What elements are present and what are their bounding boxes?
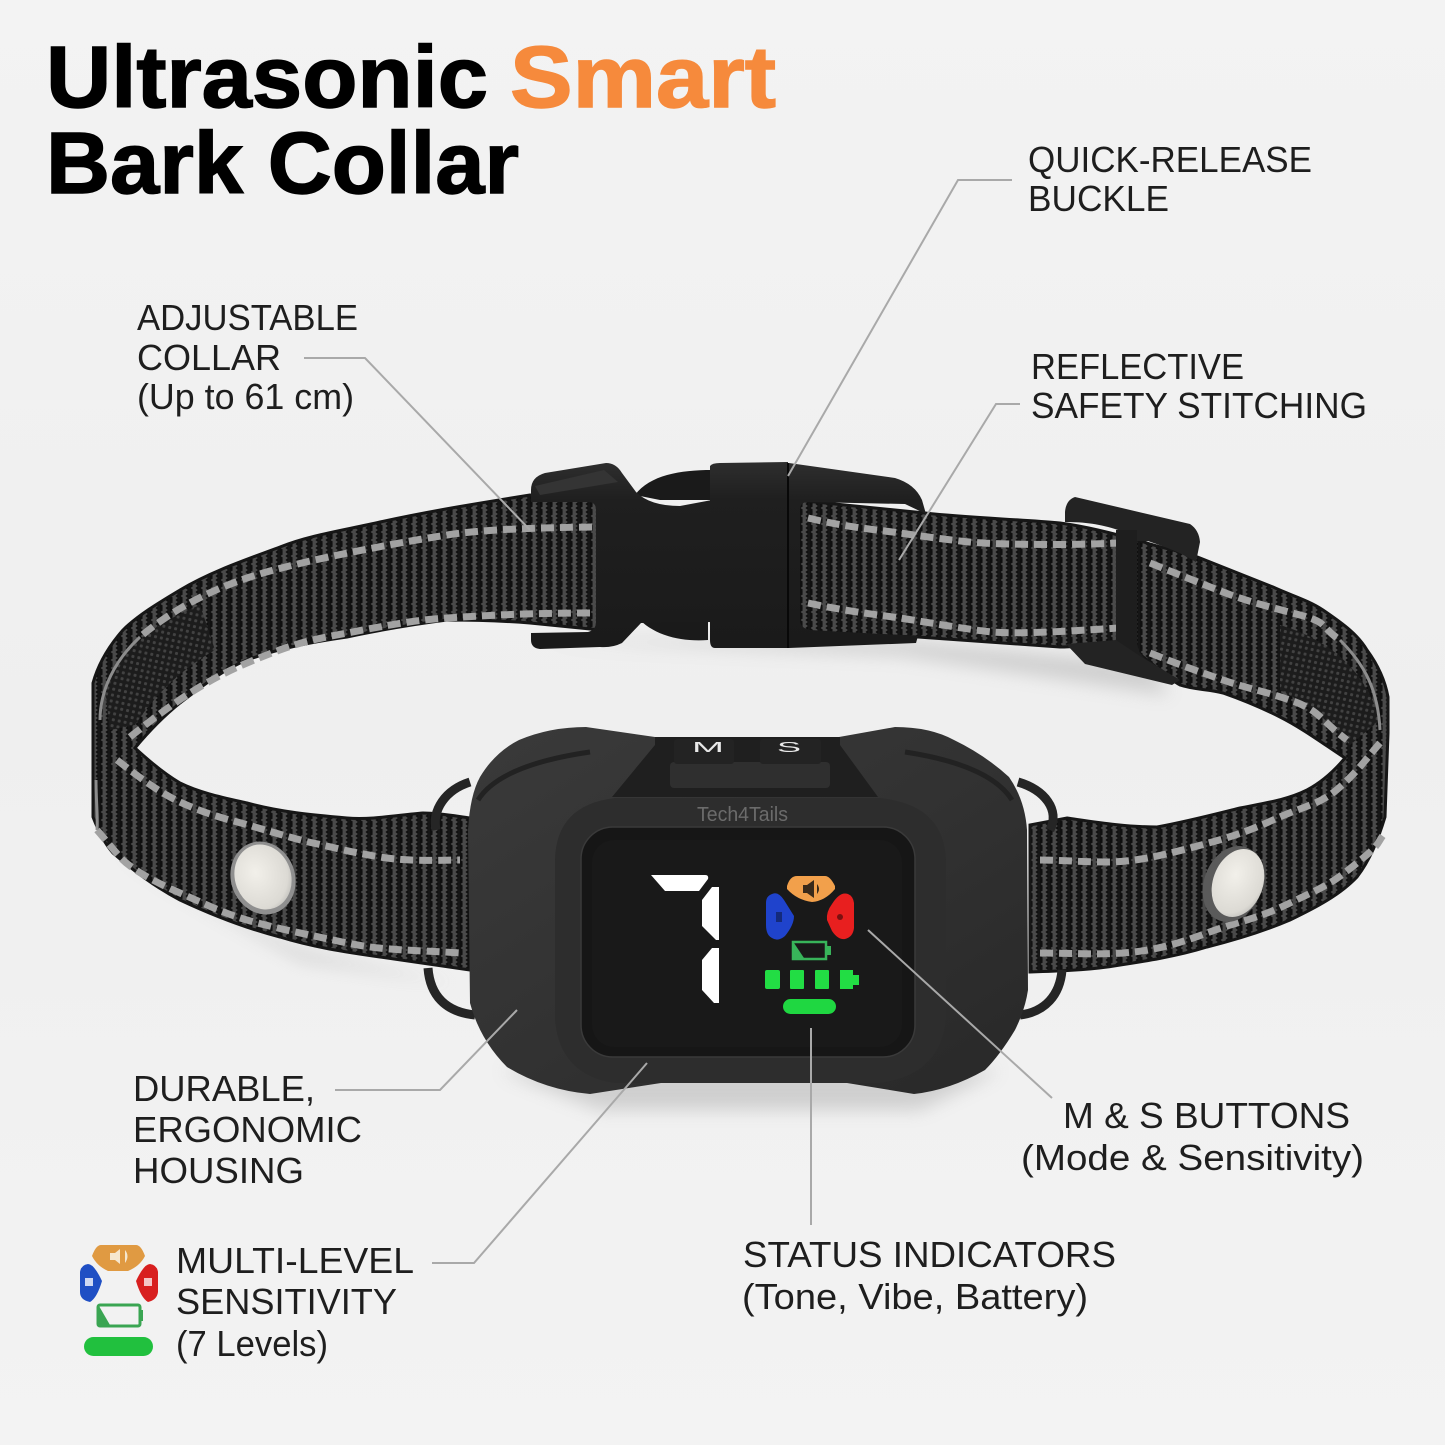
label: multi-level sensitivity <box>176 1240 414 1364</box>
strap slider keeper <box>1065 497 1200 685</box>
icon: vibration blue <box>766 893 794 940</box>
label: adjustable collar: (Up to 61 cm) <box>137 376 354 417</box>
rivet left <box>220 832 306 924</box>
label: durable housing: ERGONOMIC <box>133 1109 362 1150</box>
buckle: left clip sheen <box>535 470 618 495</box>
label: multi-level sensitivity: MULTI-LEVEL <box>176 1240 414 1281</box>
buckle: left clip <box>531 463 712 649</box>
D-ring lugs <box>428 782 1062 1015</box>
label: multi-level sensitivity: (7 Levels) <box>176 1323 328 1364</box>
stitching <box>97 518 1385 954</box>
label: durable housing <box>133 1068 362 1191</box>
label: reflective safety stitching: REFLECTIVE <box>1031 346 1244 387</box>
label: adjustable collar: ADJUSTABLE <box>137 297 358 338</box>
legend tone <box>92 1245 145 1271</box>
icon: shock red <box>827 893 854 939</box>
legend shock <box>136 1264 158 1302</box>
icon: tone <box>787 876 835 902</box>
buckle tabs <box>635 470 712 640</box>
label: durable housing: DURABLE, <box>133 1068 315 1109</box>
label: quick-release buckle <box>1028 139 1312 219</box>
label: adjustable collar <box>137 297 358 417</box>
label: M and S buttons <box>1021 1095 1364 1178</box>
legend battery <box>98 1305 140 1326</box>
label: status indicators <box>742 1234 1116 1317</box>
digit 7 <box>651 875 719 1003</box>
S button <box>760 739 821 764</box>
legend vibration <box>80 1264 102 1302</box>
keeper: centre bar <box>1116 530 1150 662</box>
label: status indicators: (Tone, Vibe, Battery) <box>742 1276 1088 1317</box>
inner curve left <box>105 605 215 730</box>
buckle seam <box>787 463 789 648</box>
title: Smart <box>510 29 776 126</box>
label: quick-release buckle: BUCKLE <box>1028 178 1169 219</box>
soft shadows under product <box>110 640 1170 1110</box>
label: status indicators: STATUS INDICATORS <box>743 1234 1116 1275</box>
title: Ultrasonic <box>46 29 488 126</box>
brand: Tech4Tails <box>697 804 788 826</box>
inner curve right <box>1280 625 1380 745</box>
device housing <box>468 727 1028 1094</box>
S button: S <box>777 739 801 756</box>
top-lobe ridge highlights <box>478 752 1012 800</box>
label: reflective safety stitching: SAFETY STITCHING <box>1031 385 1367 426</box>
label: durable housing: HOUSING <box>133 1150 304 1191</box>
leader lines <box>304 180 1052 1263</box>
label: reflective safety stitching <box>1031 346 1367 426</box>
keeper: bottom bar <box>1066 640 1180 685</box>
icon: legend indicators <box>80 1245 158 1356</box>
screen <box>592 840 902 1047</box>
title: Bark Collar <box>46 115 519 212</box>
label: adjustable collar: COLLAR <box>137 337 281 378</box>
housing body <box>468 727 1028 1094</box>
buckle: right clip <box>789 463 926 648</box>
title <box>46 29 776 212</box>
keeper: top bar <box>1065 497 1200 562</box>
curve side stitching <box>96 637 1380 830</box>
label: M and S buttons: M & S BUTTONS <box>1063 1095 1350 1136</box>
collar strap <box>93 495 1388 972</box>
label: multi-level sensitivity: SENSITIVITY <box>176 1281 397 1322</box>
label: M and S buttons: (Mode & Sensitivity) <box>1021 1137 1364 1178</box>
legend pill <box>84 1337 153 1356</box>
M button: M <box>692 739 724 756</box>
buckle: centre <box>710 462 788 648</box>
M button <box>674 739 734 764</box>
front panel <box>555 798 946 1083</box>
battery level blocks <box>765 970 859 989</box>
rivet right <box>1192 837 1274 931</box>
strap: left side <box>93 495 600 970</box>
buckle <box>531 462 926 649</box>
label: quick-release buckle: QUICK-RELEASE <box>1028 139 1312 180</box>
button base <box>612 737 878 797</box>
screen bezel <box>581 827 915 1057</box>
strap: right side <box>795 500 1388 972</box>
icon: low battery <box>793 942 831 959</box>
power pill <box>783 999 836 1014</box>
